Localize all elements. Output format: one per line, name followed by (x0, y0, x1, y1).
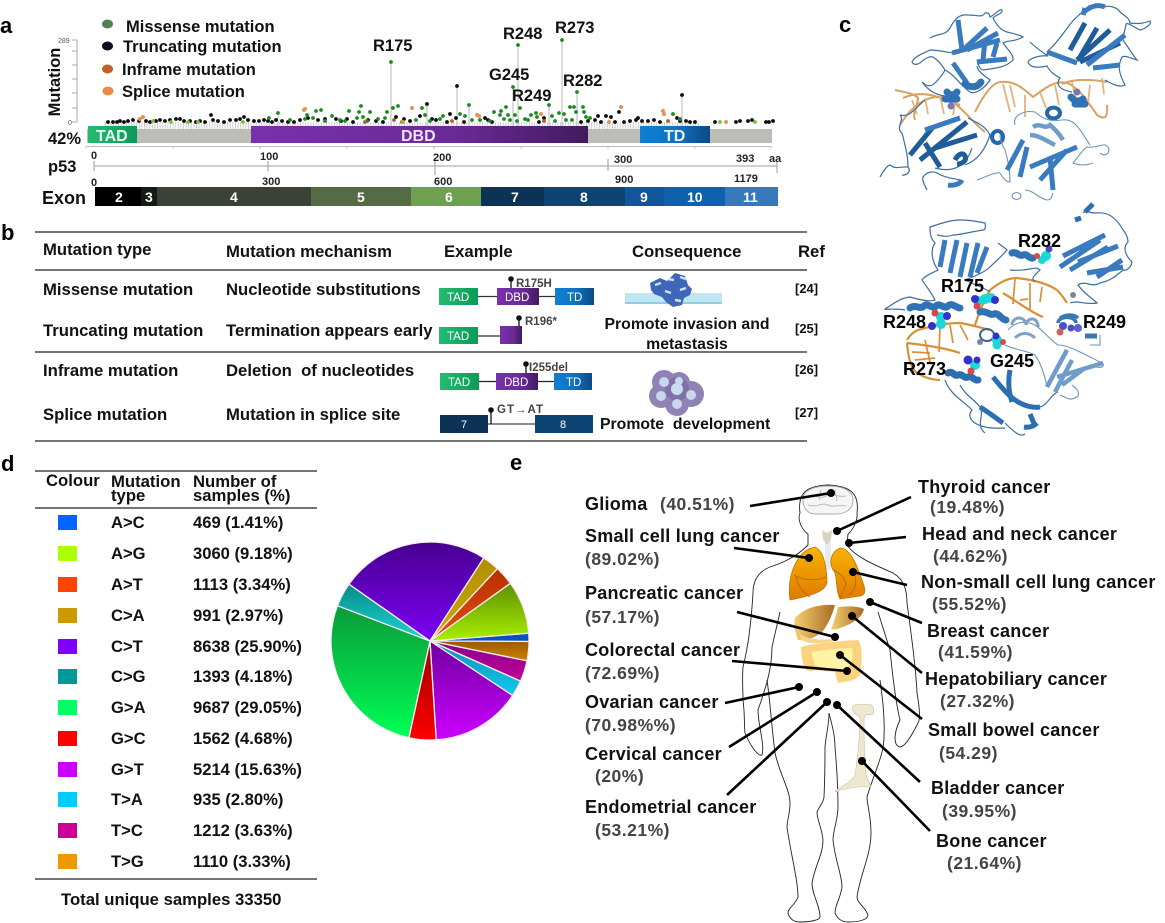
label: glioma (585, 494, 735, 514)
table rows: 1113 (3.34%) (193, 575, 291, 594)
hotspot labels: R175 (373, 37, 412, 55)
label: pancreatic: Pancreatic cancer (585, 583, 743, 603)
label: bone: (21.64%) (947, 853, 1022, 873)
table rows: G>C (111, 729, 146, 748)
row: inframe: I255del (529, 362, 568, 374)
label: endometrial: (53.21%) (595, 820, 670, 840)
table header: Mutation type (43, 240, 151, 259)
hotspot labels: R273 (555, 19, 594, 37)
label: bone: Bone cancer (936, 831, 1047, 851)
residue spheres (928, 246, 1082, 374)
exon bar: 9 (640, 189, 648, 205)
label: ovarian: (70.98%%) (585, 715, 676, 735)
row: splice: GT→AT (497, 404, 543, 416)
panel letter a: a (0, 13, 13, 38)
leader lines with dots (725, 493, 930, 831)
p53 amino-acid ruler: 0 (91, 150, 97, 162)
y axis: 289 (58, 38, 70, 45)
label: cervical: Cervical cancer (585, 744, 722, 764)
row: inframe: [26] (795, 362, 818, 377)
label: glioma: Glioma (585, 494, 648, 514)
label: bladder: Bladder cancer (931, 778, 1065, 798)
hotspot labels: R282 (563, 72, 602, 90)
table header: Mutation (111, 472, 181, 491)
table rows: 8638 (25.90%) (193, 637, 302, 656)
label: small cell lung (585, 526, 780, 569)
exon bar: 2 (115, 189, 123, 205)
hotspot labels: R249 (512, 87, 551, 105)
splice mutation dots (140, 107, 726, 122)
table total: Total unique samples 33350 (61, 890, 281, 909)
row: missense (43, 276, 818, 305)
table rows: T>C (111, 821, 143, 840)
exon bar: 6 (445, 189, 453, 205)
exon bar: Exon (42, 188, 86, 208)
row: missense: DBD (505, 292, 529, 304)
label: small cell lung: (89.02%) (585, 549, 660, 569)
table rows: 469 (1.41%) (193, 513, 283, 532)
row: missense: R175H (516, 278, 552, 290)
organ: intestines (801, 640, 862, 683)
row: splice: [27] (795, 405, 818, 420)
legend: Truncating mutation (123, 38, 282, 56)
residue labels: R273 (903, 359, 946, 379)
table header: type (111, 486, 145, 505)
legend: Splice mutation (122, 83, 245, 101)
table header: Number of (193, 472, 277, 491)
legend: Inframe mutation (122, 61, 256, 79)
label: small bowel (928, 720, 1100, 763)
table rows: G>T (111, 760, 144, 779)
row: truncating (43, 315, 818, 344)
panel c: protein structures (839, 5, 1150, 435)
p53 amino-acid ruler: 100 (260, 151, 278, 163)
row: splice: Splice mutation (43, 405, 167, 424)
label: head and neck: (44.62%) (933, 546, 1008, 566)
table rows: T>A (111, 790, 143, 809)
label: non-small cell lung: Non-small cell lung cancer (921, 572, 1156, 592)
label: hepatobiliary (925, 669, 1107, 711)
row: missense: Missense mutation (43, 280, 193, 299)
label: pancreatic (585, 583, 743, 627)
residue labels: R282 (1018, 231, 1061, 251)
p53 amino-acid ruler (48, 146, 782, 189)
panel e: cancer types on body map (510, 450, 1156, 922)
consequence: development text: Promote development (600, 416, 771, 433)
pie chart (331, 542, 529, 740)
p53 amino-acid ruler: 300 (262, 176, 280, 188)
protein domain bar: 42% (48, 130, 81, 148)
exon bar (42, 187, 778, 208)
exon bar: 5 (357, 189, 365, 205)
y axis: 0 (68, 120, 72, 127)
label: glioma: (40.51%) (660, 494, 735, 514)
label: ovarian (585, 692, 719, 735)
row: splice (43, 404, 818, 433)
panel d: mutation colour table and pie (1, 451, 529, 909)
truncating mutation dots (108, 86, 773, 122)
protein domain bar: TAD (96, 128, 128, 145)
hotspot labels: R248 (503, 25, 542, 43)
exon bar: 8 (580, 189, 588, 205)
label: endometrial (585, 797, 757, 840)
residue labels: R248 (883, 312, 926, 332)
table rows: 1562 (4.68%) (193, 729, 293, 748)
label: non-small cell lung (921, 572, 1156, 614)
row: splice: 8 (560, 419, 566, 431)
label: bladder (931, 778, 1065, 821)
lower structure with hotspot residues (883, 204, 1132, 435)
table rules (35, 232, 807, 441)
table rows: C>G (111, 667, 146, 686)
consequence: invasion text (604, 316, 770, 353)
row: missense: [24] (795, 281, 818, 296)
missense mutation dots (269, 40, 680, 122)
table header (46, 471, 290, 505)
panel letter e: e (510, 450, 522, 475)
label: colorectal: Colorectal cancer (585, 640, 740, 660)
table header (43, 240, 825, 261)
table header: Colour (46, 471, 100, 490)
label: colorectal (585, 640, 740, 683)
residue labels (883, 231, 1126, 379)
p53 amino-acid ruler: 200 (433, 152, 451, 164)
table rows: 1212 (3.63%) (193, 821, 293, 840)
label: ovarian: Ovarian cancer (585, 692, 719, 712)
inframe mutation dots (365, 120, 668, 122)
exon bar: 10 (687, 189, 703, 205)
table rows: T>G (111, 852, 144, 871)
exon bar: 3 (145, 189, 153, 205)
p53 amino-acid ruler: 1179 (734, 173, 758, 185)
panel b: mutation type table (1, 220, 825, 441)
row: inframe (43, 361, 818, 390)
table rows: 3060 (9.18%) (193, 544, 293, 563)
residue labels: R175 (941, 276, 984, 296)
row: inframe: Deletion of nucleotides (226, 361, 414, 380)
label: head and neck: Head and neck cancer (922, 524, 1117, 544)
lollipop stems (105, 40, 700, 129)
row: truncating: Termination appears early (226, 321, 433, 340)
label: colorectal: (72.69%) (585, 663, 660, 683)
legend (102, 18, 282, 101)
row: splice: Mutation in splice site (226, 405, 400, 424)
label: hepatobiliary: Hepatobiliary cancer (925, 669, 1107, 689)
label: small bowel: (54.29) (939, 743, 998, 763)
table rows: 991 (2.97%) (193, 606, 283, 625)
table rows: A>C (111, 513, 145, 532)
consequence: invasion text: Promote invasion and (604, 316, 770, 333)
hotspot labels: G245 (489, 66, 529, 84)
p53 amino-acid ruler: 0 (91, 177, 97, 189)
row: truncating: Truncating mutation (43, 321, 203, 340)
label: breast (927, 621, 1049, 662)
table rows: A>T (111, 575, 143, 594)
table rows (58, 513, 302, 871)
table rows: 9687 (29.05%) (193, 698, 302, 717)
table header: Ref (798, 242, 825, 261)
label: head and neck (922, 524, 1117, 566)
row: inframe: DBD (504, 377, 528, 389)
p53 amino-acid ruler: 393 (736, 153, 754, 165)
organ: femur bone (835, 704, 874, 792)
body outline (743, 485, 919, 922)
exon bar: 7 (511, 189, 519, 205)
table rows: G>A (111, 698, 146, 717)
table rows: 5214 (15.63%) (193, 760, 302, 779)
label: thyroid: Thyroid cancer (918, 477, 1051, 497)
row: truncating: [25] (795, 321, 818, 336)
panel letter b: b (1, 220, 14, 245)
label: endometrial: Endometrial cancer (585, 797, 757, 817)
table header: samples (%) (193, 486, 290, 505)
icon: invasion cells (625, 273, 722, 307)
panel letter d: d (1, 451, 14, 476)
row: inframe: TAD (448, 377, 470, 389)
row: truncating: R196* (525, 316, 557, 328)
label: small cell lung: Small cell lung cancer (585, 526, 780, 546)
table header: Mutation mechanism (226, 242, 392, 261)
p53 amino-acid ruler: 600 (434, 176, 452, 188)
label: cervical (585, 744, 722, 786)
label: small bowel: Small bowel cancer (928, 720, 1100, 740)
label: bone (936, 831, 1047, 873)
p53 amino-acid ruler: p53 (48, 158, 76, 176)
row: inframe: TD (566, 377, 581, 389)
table rows: 1393 (4.18%) (193, 667, 293, 686)
label: bladder: (39.95%) (942, 801, 1017, 821)
y axis: Mutation (46, 48, 64, 116)
organ: liver and stomach (794, 605, 864, 643)
light green dots (153, 121, 755, 122)
protein domain bar: TD (664, 128, 685, 145)
panel a: p53 lollipop plot (0, 13, 782, 208)
organ: brain (803, 486, 853, 514)
upper structure: p53 tetramer on DNA (880, 5, 1150, 200)
hotspot labels (373, 19, 602, 105)
label: thyroid (918, 477, 1051, 517)
table rows: A>G (111, 544, 146, 563)
table rows: 935 (2.80%) (193, 790, 283, 809)
p53 amino-acid ruler: 900 (615, 174, 633, 186)
table rows: C>T (111, 637, 143, 656)
row: inframe: Inframe mutation (43, 361, 178, 380)
icon: tumour cell cluster (649, 370, 704, 416)
exon bar: 4 (230, 189, 238, 205)
label: cervical: (20%) (595, 766, 644, 786)
row: splice: 7 (461, 419, 467, 431)
protein domain bar (48, 126, 772, 148)
label: pancreatic: (57.17%) (585, 607, 660, 627)
residue labels: R249 (1083, 312, 1126, 332)
organ: lungs (789, 547, 865, 600)
table rows: 1110 (3.33%) (193, 852, 291, 871)
label: hepatobiliary: (27.32%) (940, 691, 1015, 711)
row: missense: Nucleotide substitutions (226, 280, 421, 299)
table header: Example (444, 242, 513, 261)
p53 amino-acid ruler: 300 (614, 154, 632, 166)
row: missense: TD (567, 292, 582, 304)
label: thyroid: (19.48%) (930, 497, 1005, 517)
consequence: invasion text: metastasis (646, 336, 728, 353)
label: non-small cell lung: (55.52%) (932, 594, 1007, 614)
row: truncating: TAD (447, 331, 469, 343)
y axis (46, 38, 77, 127)
p53 amino-acid ruler: aa (769, 153, 782, 165)
protein domain bar: DBD (401, 128, 436, 145)
label: breast: (41.59%) (938, 642, 1013, 662)
legend: Missense mutation (126, 18, 275, 36)
table rules (35, 471, 317, 879)
table rows: C>A (111, 606, 145, 625)
residue labels: G245 (990, 351, 1034, 371)
organ: trachea and thyroid (822, 530, 832, 570)
label: breast: Breast cancer (927, 621, 1049, 641)
panel letter c: c (839, 12, 851, 37)
table header: Consequence (632, 242, 741, 261)
row: missense: TAD (447, 292, 469, 304)
exon bar: 11 (743, 189, 758, 205)
